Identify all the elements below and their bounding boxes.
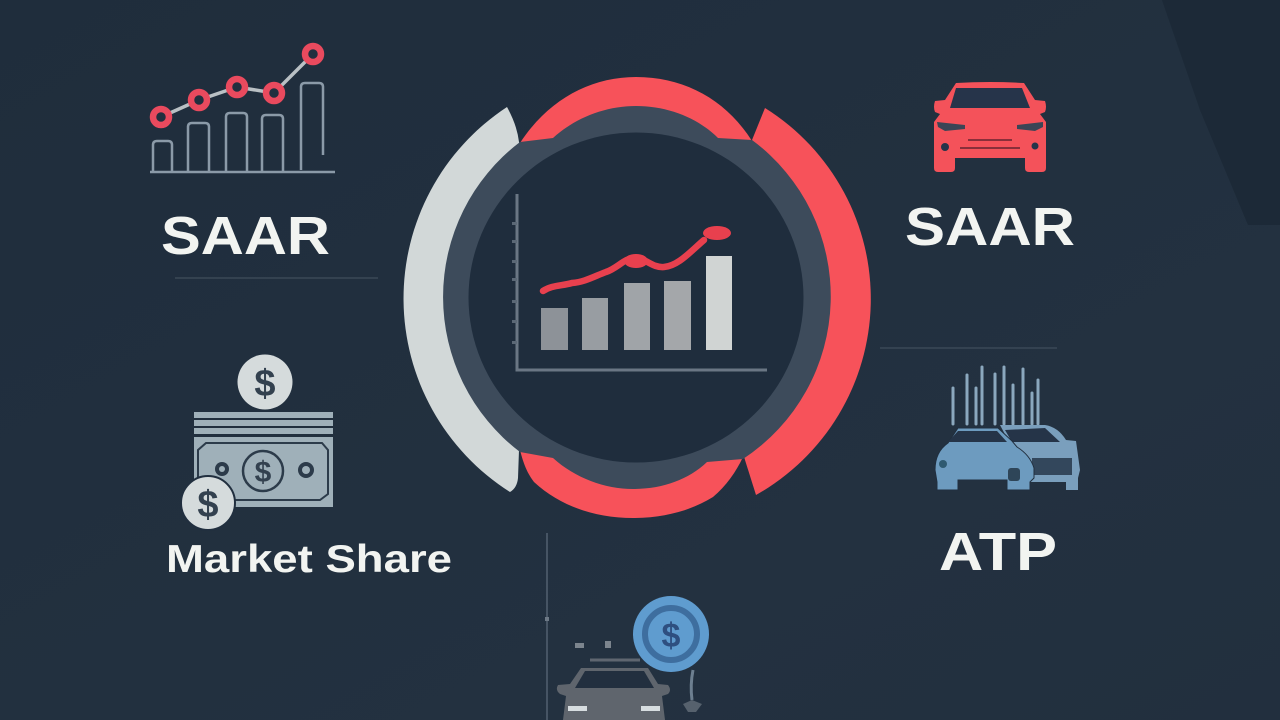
panel: bottom car and coin xyxy=(545,533,709,720)
panel: top-left SAAR xyxy=(150,46,335,266)
chart: central bar and line chart xyxy=(512,194,767,370)
label: SAAR left: SAAR xyxy=(161,206,330,266)
icon: grey car xyxy=(557,641,670,720)
icon: cash and coins: $ xyxy=(254,363,276,405)
panel: ATP xyxy=(935,367,1080,582)
label: ATP: ATP xyxy=(939,522,1057,582)
icon: line and bar chart xyxy=(150,46,335,172)
chart bars xyxy=(541,256,732,350)
icon: red car front xyxy=(934,82,1046,172)
icon: cash and coins: $ xyxy=(197,484,219,526)
label: Market Share: Market Share xyxy=(166,538,452,581)
ring: inner dark circle xyxy=(468,132,804,462)
chart trend line xyxy=(543,226,731,291)
ring: dark grey band xyxy=(443,106,831,489)
arc: left grey segment xyxy=(404,107,560,492)
icon: cash and coins xyxy=(181,354,333,530)
arc: right red segment xyxy=(700,108,871,495)
panel: central ring diagram xyxy=(404,77,871,518)
icon: cash and coins: $ xyxy=(255,456,272,489)
label: SAAR right: SAAR xyxy=(905,197,1075,257)
panel: Market Share xyxy=(166,354,452,581)
arc: bottom red segment xyxy=(520,430,743,518)
divider axis xyxy=(545,533,549,720)
icon: blue dollar coin xyxy=(633,596,709,712)
chart axes xyxy=(517,194,767,370)
panel: top-right SAAR xyxy=(905,82,1075,257)
icon: blue dollar coin: $ xyxy=(662,617,681,655)
arc: top red segment xyxy=(520,77,752,170)
icon: two blue cars with price spikes xyxy=(935,367,1080,490)
